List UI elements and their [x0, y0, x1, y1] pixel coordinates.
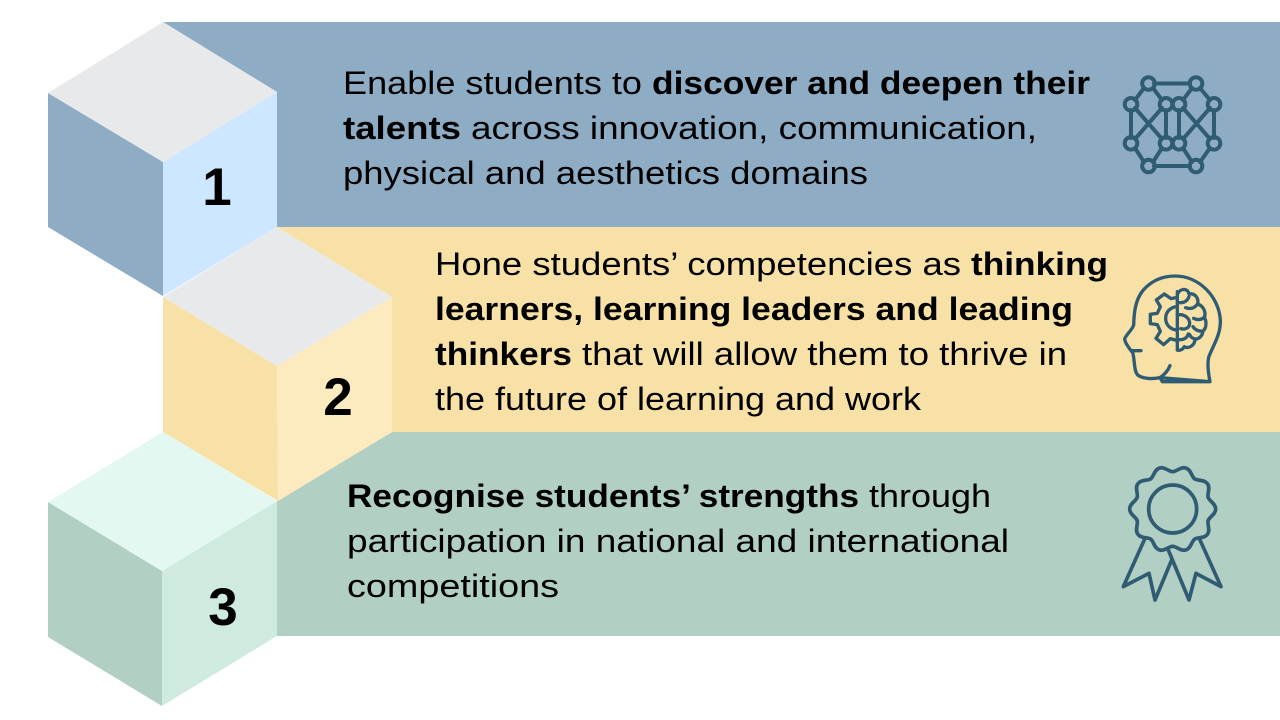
- text block: band 1: [343, 65, 1090, 191]
- text block: band 1: physical and aesthetics domains: [343, 155, 868, 191]
- text block: band 3: participation in national and international: [347, 523, 1009, 559]
- text block: band 2: the future of learning and work: [435, 381, 922, 417]
- icon: head with gear and brain: [1125, 276, 1220, 382]
- text block: band 1: talents: [343, 110, 461, 146]
- text block: band 2: that will allow them to thrive in: [582, 336, 1067, 372]
- text block: band 3: through: [869, 478, 991, 514]
- text block: band 3: [347, 478, 1009, 604]
- number 2: 2: [323, 368, 353, 427]
- number 1: 1: [202, 158, 232, 217]
- cube 1: [48, 22, 277, 296]
- cube 2: [163, 227, 392, 501]
- text block: band 1: Enable students to: [343, 65, 642, 101]
- text block: band 2: Hone students’ competencies as: [435, 246, 961, 282]
- icon: network: [1125, 77, 1220, 172]
- text block: band 2: [435, 246, 1108, 417]
- text block: band 2: thinking: [971, 246, 1108, 282]
- text block: band 1: discover and deepen their: [652, 65, 1090, 101]
- number 3: 3: [208, 578, 238, 637]
- text block: band 3: competitions: [347, 568, 559, 604]
- panel: band 2: [277, 227, 1280, 432]
- icon: award rosette: [1123, 463, 1221, 600]
- text block: band 2: thinkers: [435, 336, 572, 372]
- panel: band 1: [163, 22, 1280, 227]
- panel: band 3: [277, 432, 1280, 636]
- cube 3: [48, 432, 277, 706]
- text block: band 1: across innovation, communication,: [471, 110, 1037, 146]
- text block: band 3: Recognise students’ strengths: [347, 478, 859, 514]
- text block: band 2: learners, learning leaders and leading: [435, 291, 1073, 327]
